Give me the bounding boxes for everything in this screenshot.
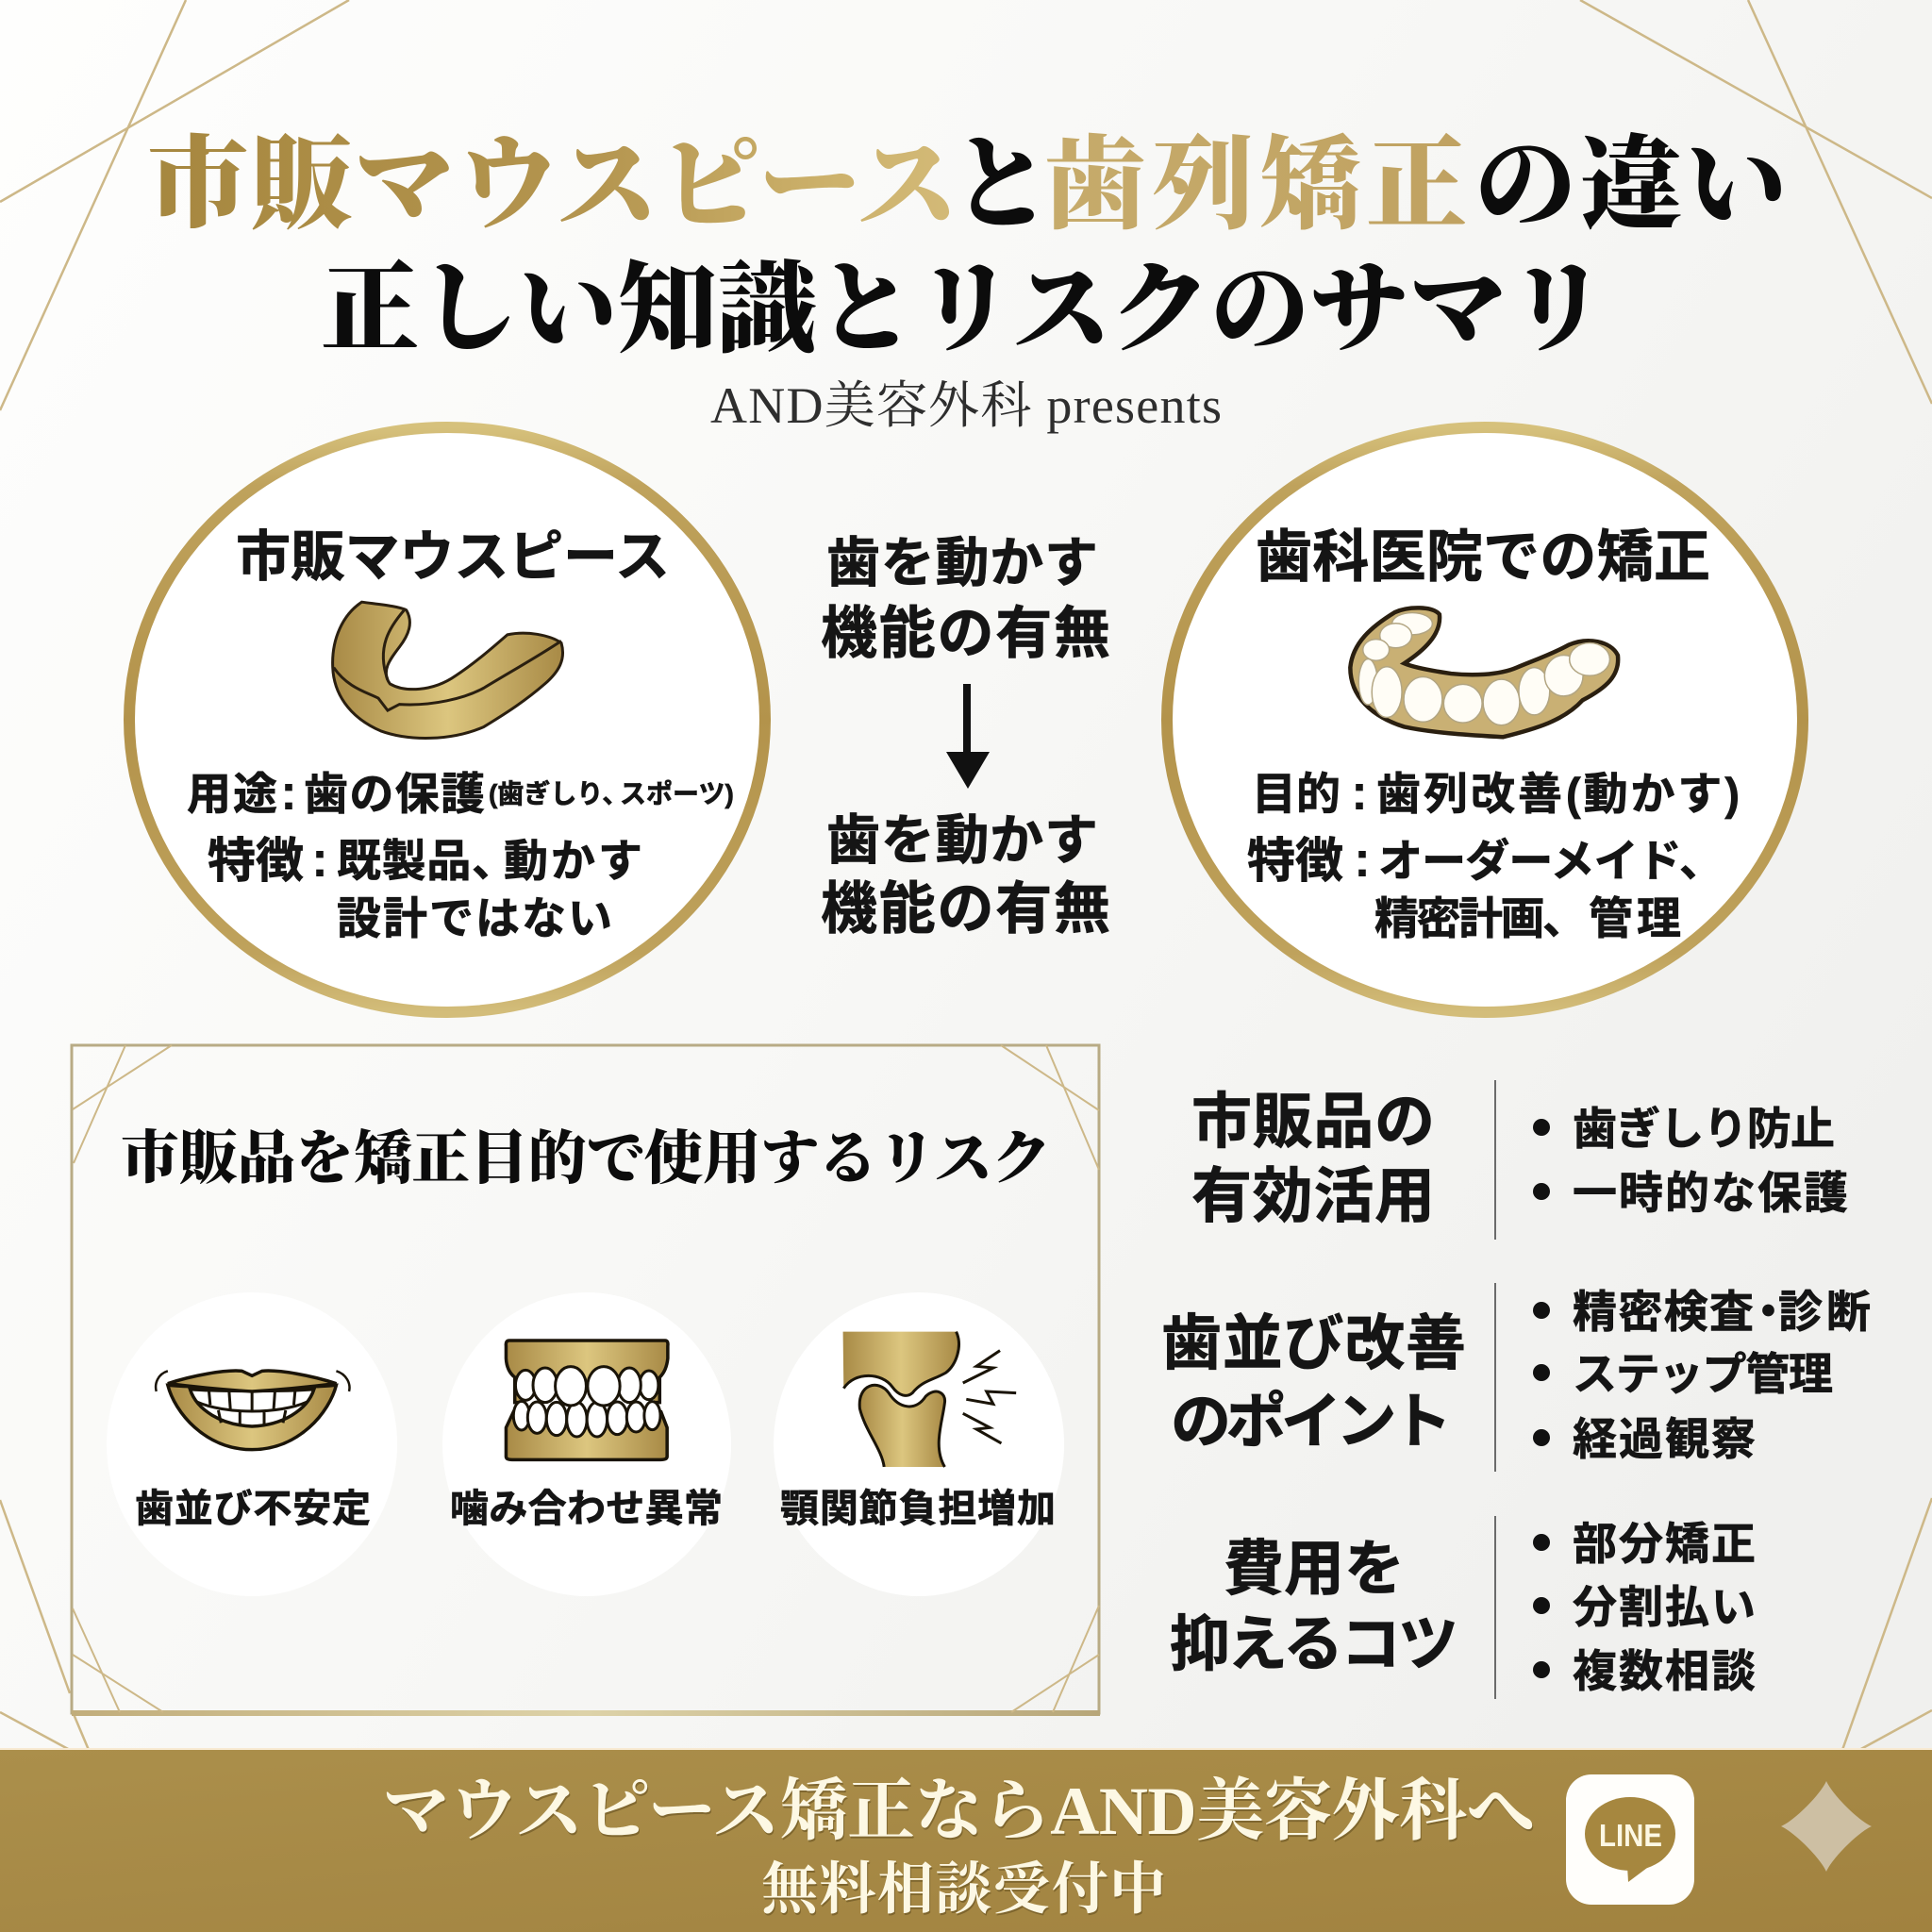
icon: sparkle: [1781, 1781, 1872, 1872]
heading: 市販マウスピース: [236, 526, 670, 588]
circle ring: [1167, 427, 1803, 1012]
panel: summary list: [1161, 1080, 1871, 1699]
icon: LINE: LINE: [1599, 1818, 1662, 1853]
title: [147, 130, 1788, 365]
arrow: [946, 684, 990, 789]
bottom label: 歯を動かす: [826, 810, 1098, 871]
icon: jaw joint: [843, 1332, 1016, 1467]
features text: オーダーメイド、: [1378, 836, 1724, 886]
label: 顎関節負担増加: [780, 1487, 1056, 1530]
row: effective use of retail products: 一時的な保護: [1573, 1168, 1848, 1218]
features text: 設計ではない: [337, 893, 612, 943]
risk: bite abnormality: [442, 1292, 731, 1596]
usage text: (歯ぎしり、: [489, 779, 628, 808]
title: 歯列矯正: [1044, 130, 1468, 242]
row: tips to reduce cost: [1170, 1516, 1756, 1699]
features text: 精密計画、: [1374, 893, 1587, 943]
row: tips to reduce cost: 部分矯正: [1573, 1519, 1756, 1569]
row: effective use of retail products: 市販品の: [1191, 1088, 1435, 1156]
row: effective use of retail products: 有効活用: [1191, 1162, 1435, 1230]
row: points for improving alignment: ステップ管理: [1573, 1349, 1833, 1399]
row: tips to reduce cost: 抑えるコツ: [1170, 1610, 1458, 1678]
label: 噛み合わせ異常: [450, 1487, 723, 1530]
subtitle: AND美容外科 presents: [710, 377, 1222, 434]
circle ring: [129, 427, 765, 1012]
row: points for improving alignment: 精密検査: [1573, 1287, 1754, 1337]
row: effective use of retail products: 歯ぎしり防止: [1573, 1104, 1835, 1154]
row: points for improving alignment: 歯並び改善: [1161, 1309, 1466, 1377]
icon: clenched teeth: [506, 1341, 668, 1459]
usage text: [187, 764, 734, 821]
icon: LINE: [1566, 1774, 1694, 1905]
row: points for improving alignment: 経過観察: [1573, 1414, 1756, 1464]
icon: aligner: [1350, 608, 1618, 737]
title: 市販マウスピース: [147, 130, 958, 242]
purpose text: 歯列改善: [1376, 769, 1562, 819]
footer headline: マウスピース矯正ならAND美容外科へ: [382, 1774, 1535, 1849]
label: 歯並び不安定: [135, 1487, 371, 1530]
row: points for improving alignment: ・: [1746, 1287, 1790, 1337]
row: effective use of retail products: [1191, 1080, 1848, 1240]
footer band: [0, 1748, 1932, 1932]
panel frame: [72, 1045, 1099, 1713]
row: tips to reduce cost: 分割払い: [1573, 1582, 1756, 1632]
features text: 既製品、: [337, 836, 516, 886]
features text: [208, 831, 642, 943]
row: points for improving alignment: 診断: [1778, 1287, 1871, 1337]
purpose text: 目的: [1252, 769, 1341, 819]
purpose text: :: [1351, 764, 1368, 821]
purpose text: [1252, 764, 1740, 821]
purpose text: (動かす): [1566, 769, 1740, 819]
usage text: 歯の保護: [304, 769, 485, 819]
panel: center comparison: 機能の有無: [821, 877, 1110, 941]
features text: 動かす: [504, 836, 642, 886]
title: と: [950, 130, 1052, 242]
features text: 特徴: [208, 834, 304, 888]
panel: retail mouthguard circle: [129, 427, 765, 1012]
row: tips to reduce cost: 複数相談: [1573, 1646, 1756, 1696]
features text: [1247, 831, 1724, 943]
panel: dental clinic circle: [1167, 427, 1803, 1012]
heading: 歯科医院での矯正: [1256, 525, 1710, 589]
panel: risks of retail use: [72, 1045, 1100, 1716]
icon: smiling mouth: [156, 1371, 349, 1450]
features text: :: [1354, 831, 1371, 888]
features text: 特徴: [1247, 834, 1343, 888]
row: tips to reduce cost: 費用を: [1224, 1535, 1405, 1603]
usage text: 用途: [187, 769, 277, 819]
footer subline: 無料相談受付中: [761, 1858, 1166, 1921]
corner accents: [73, 1045, 1099, 1712]
usage text: スポーツ): [620, 779, 734, 808]
title: 正しい知識とリスクのサマリ: [321, 255, 1607, 365]
features text: :: [311, 831, 328, 888]
risk: jaw joint strain: [774, 1292, 1064, 1596]
panel: center comparison: [821, 533, 1110, 941]
icon: mouthguard: [333, 602, 563, 738]
title: の違い: [1474, 130, 1788, 242]
top label: 歯を動かす: [826, 533, 1098, 593]
panel: center comparison: 機能の有無: [821, 602, 1110, 665]
panel bottom edge: [72, 1710, 1100, 1716]
risk: unstable alignment: [107, 1292, 397, 1596]
row: points for improving alignment: [1161, 1283, 1871, 1472]
row: points for improving alignment: のポイント: [1171, 1388, 1452, 1456]
panel heading: 市販品を矯正目的で使用するリスク: [121, 1127, 1051, 1191]
features text: 管理: [1589, 893, 1681, 943]
usage text: :: [280, 764, 297, 821]
